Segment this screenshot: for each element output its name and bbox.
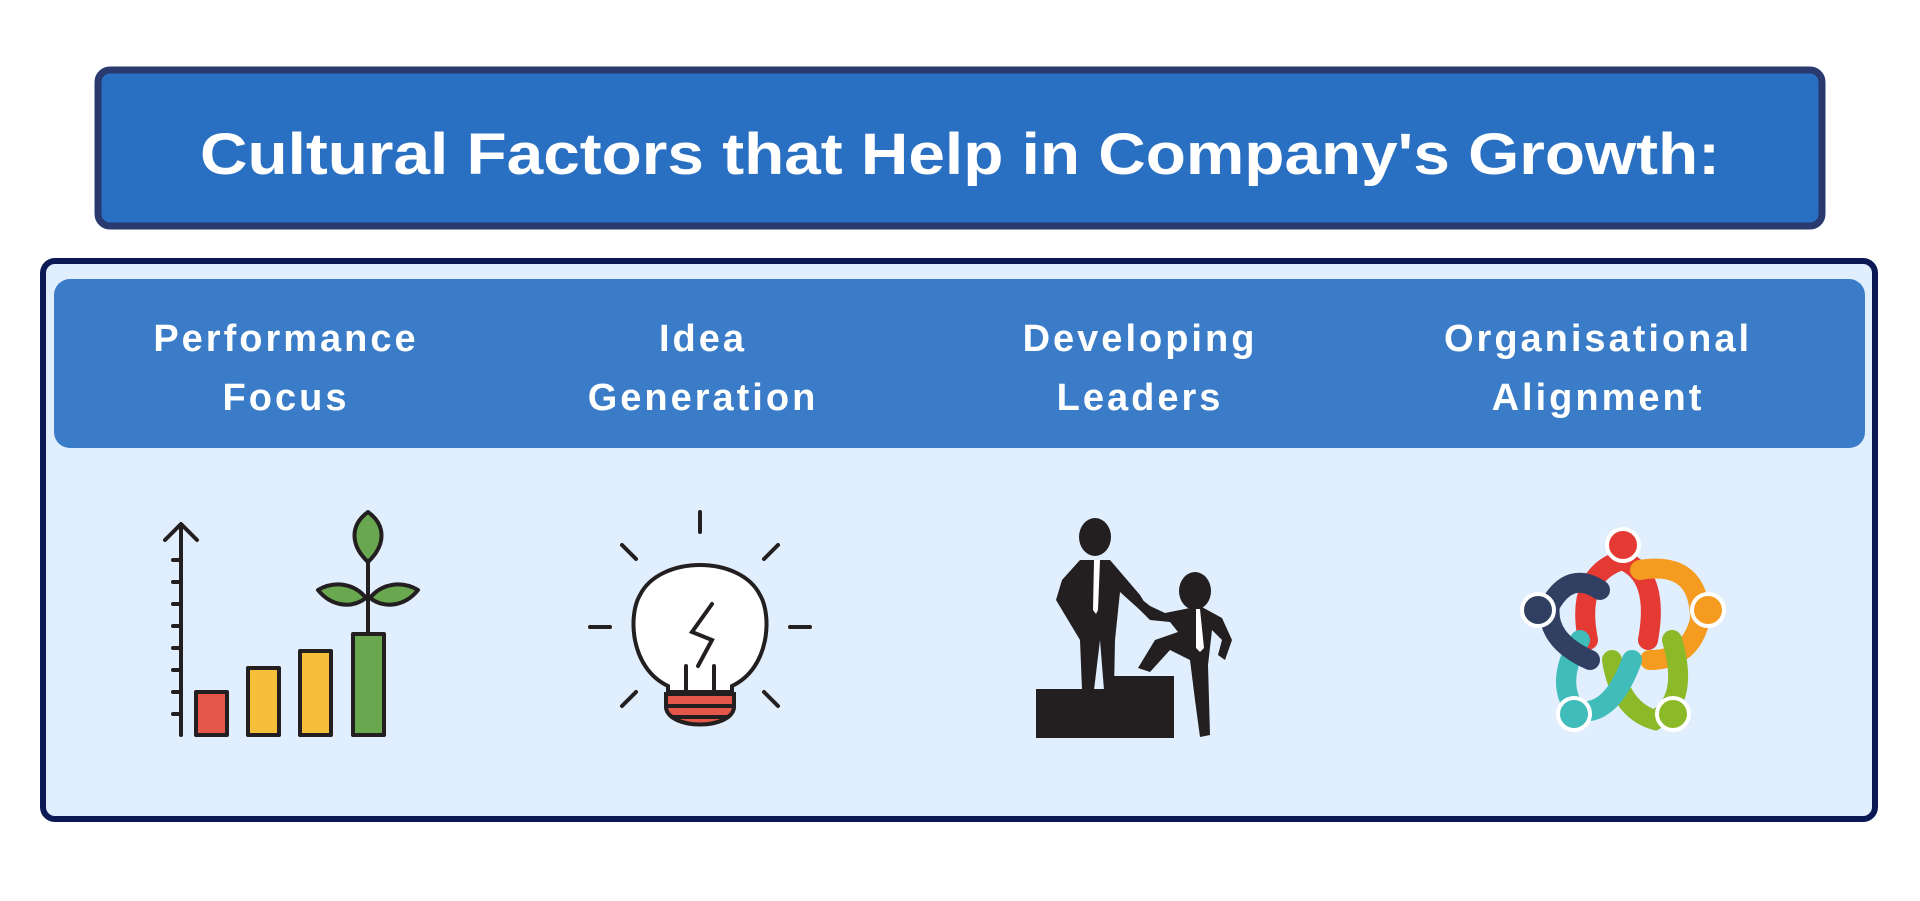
title banner xyxy=(98,70,1822,226)
panel: factors xyxy=(43,261,1875,819)
heading: Performance Focus: Focus xyxy=(223,377,349,419)
team heads xyxy=(1522,529,1724,730)
heading: Organisational Alignment: Alignment xyxy=(1492,377,1704,419)
icon: team circle xyxy=(1550,560,1700,720)
heading: Idea Generation: Idea xyxy=(659,318,747,360)
icon: growth bar chart xyxy=(165,512,418,735)
heading: Idea Generation xyxy=(588,318,818,419)
heading: Developing Leaders: Leaders xyxy=(1057,377,1223,419)
heading: Performance Focus xyxy=(153,318,419,419)
heading: Developing Leaders: Developing xyxy=(1023,318,1257,360)
heading: Organisational Alignment xyxy=(1444,318,1752,419)
title: Cultural Factors that Help in Company's Growth: xyxy=(200,122,1720,187)
heading: Performance Focus: Performance xyxy=(153,318,419,360)
heading: Organisational Alignment: Organisational xyxy=(1444,318,1752,360)
heading: Idea Generation: Generation xyxy=(588,377,818,419)
icon: lightbulb xyxy=(590,512,810,724)
heading: Developing Leaders xyxy=(1023,318,1257,419)
header band xyxy=(54,279,1865,448)
icon: leaders helping xyxy=(1036,518,1232,738)
